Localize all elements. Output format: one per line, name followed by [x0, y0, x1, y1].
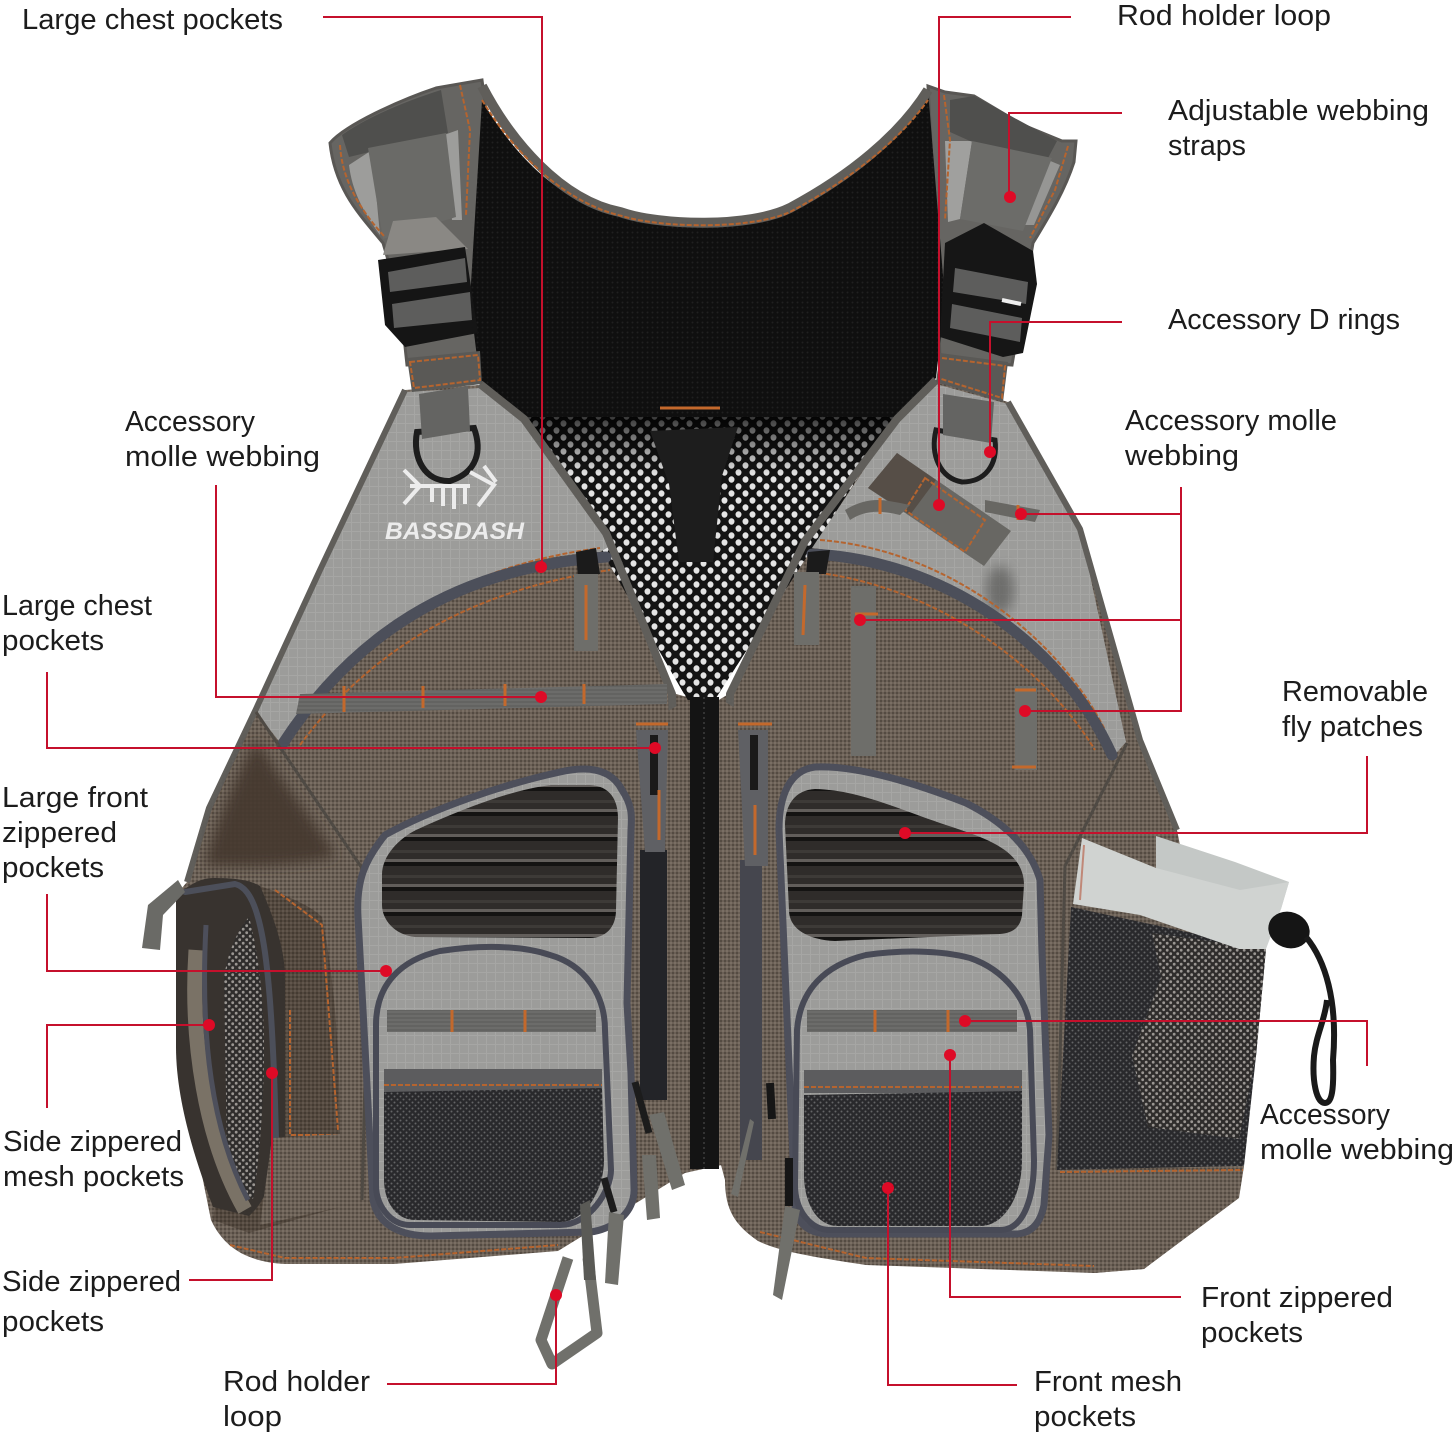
left chest molle strap	[296, 684, 667, 714]
left fly patch	[382, 785, 618, 938]
left side zipped pocket	[176, 878, 340, 1225]
label: accessory molle webbing lower right: Accessory	[1260, 1099, 1390, 1131]
right pocket mesh	[804, 1091, 1022, 1226]
label: rod holder loop bottom	[223, 1366, 370, 1433]
label: side zippered mesh pockets: mesh pockets	[3, 1161, 184, 1193]
label: side zippered pockets	[2, 1266, 181, 1338]
label: large chest pockets left	[2, 590, 152, 657]
orange tab stitching	[660, 406, 720, 410]
label: accessory D rings: Accessory D rings	[1168, 304, 1400, 336]
right chest light panel	[812, 384, 1126, 758]
label: large front zippered pockets: zippered	[2, 817, 117, 849]
label: removable fly patches	[1282, 676, 1428, 743]
right chest zipper	[812, 540, 1112, 755]
right fly patch	[785, 789, 1024, 941]
label: adjustable webbing straps	[1168, 95, 1429, 162]
rod holder loop	[541, 1258, 597, 1364]
bottom hem stitching	[230, 1232, 1094, 1266]
leader: large chest pockets top	[323, 17, 547, 573]
label: side zippered mesh pockets: Side zippered	[3, 1126, 182, 1158]
label: front mesh pockets: Front mesh	[1034, 1366, 1182, 1398]
right buckle	[940, 223, 1037, 357]
label: front zippered pockets: Front zippered	[1201, 1282, 1393, 1314]
left buckle	[378, 217, 478, 347]
flap shadow	[986, 566, 1014, 614]
left chest zipper	[282, 548, 610, 745]
right lower strap and D ring	[934, 353, 1008, 482]
label: right accessory molle webbing	[1124, 405, 1337, 472]
side seam left	[256, 712, 370, 1200]
logo: fish emblem	[404, 466, 496, 509]
right chest small tab	[1012, 686, 1037, 770]
leader: rod holder loop top	[933, 17, 1071, 511]
left side panel	[213, 886, 340, 1233]
left shoulder strap	[330, 80, 486, 365]
label: large front zippered pockets	[2, 782, 148, 884]
pale drawstring flap	[1073, 836, 1289, 949]
center mesh mask over body	[524, 417, 897, 704]
leader: side zippered mesh pockets	[47, 1019, 215, 1108]
right bottom zipper pulls	[731, 1083, 800, 1300]
right chest vertical strap	[851, 586, 878, 756]
right front pocket	[795, 952, 1034, 1230]
side seam right	[1057, 743, 1127, 1170]
bottom brown band	[1057, 1166, 1244, 1273]
label: side zippered mesh pockets	[3, 1126, 184, 1193]
neck binding	[482, 86, 928, 223]
leader: front mesh pockets	[882, 1182, 1017, 1385]
label: side zippered pockets: pockets	[2, 1306, 104, 1338]
right mesh bottle pocket	[1057, 907, 1266, 1273]
lighter mesh sleeve	[1132, 933, 1266, 1139]
label: right accessory molle webbing: webbing	[1124, 440, 1239, 472]
leader: front zippered pockets	[944, 1049, 1181, 1297]
label: large front zippered pockets: Large front	[2, 782, 148, 814]
left upper pocket	[358, 769, 634, 1236]
label: rod holder loop bottom: Rod holder	[223, 1366, 370, 1398]
label: left accessory molle webbing: molle webbing	[125, 441, 320, 473]
left bottom zipper pulls	[580, 1082, 685, 1285]
leader: accessory D rings	[984, 322, 1122, 458]
label: front zippered pockets: pockets	[1201, 1317, 1303, 1349]
leader: rod holder loop bottom	[387, 1289, 562, 1384]
label: accessory molle webbing lower right: molle webbing	[1260, 1134, 1454, 1166]
center mesh panel	[524, 417, 897, 704]
left vertical zipper	[636, 724, 668, 1100]
left lower strap and D ring	[407, 351, 482, 481]
right upper pocket	[779, 767, 1049, 1234]
leader: large front zippered pockets	[47, 894, 392, 977]
outer left binding	[187, 390, 405, 882]
label: front mesh pockets	[1034, 1366, 1182, 1433]
logo: wordmark: BASSDASH	[385, 518, 525, 545]
leader: left accessory molle webbing	[216, 485, 547, 703]
label: adjustable webbing straps: straps	[1168, 130, 1246, 162]
leader: accessory molle webbing lower right	[959, 1015, 1367, 1066]
label: front mesh pockets: pockets	[1034, 1401, 1136, 1433]
label: large chest pockets left: pockets	[2, 625, 104, 657]
label: left accessory molle webbing	[125, 406, 320, 473]
drawstring toggle and cord	[1263, 906, 1334, 1103]
left front pocket	[376, 947, 611, 1225]
label: rod holder loop top: Rod holder loop	[1117, 0, 1331, 32]
vest body base	[176, 380, 1244, 1273]
center placket	[640, 700, 778, 1172]
mesh top shade	[524, 417, 897, 475]
left side panel stitches	[275, 890, 340, 1135]
left pocket molle strap	[387, 1010, 596, 1032]
dark side panel left	[205, 740, 336, 866]
right pocket flap band	[804, 1070, 1022, 1093]
leader: side zippered pockets	[189, 1067, 278, 1280]
orange neck stitching	[482, 100, 928, 225]
black neck mesh	[470, 90, 945, 417]
upper right molle strip	[845, 498, 1040, 522]
label: large chest pockets left: Large chest	[2, 590, 152, 622]
label: front zippered pockets	[1201, 1282, 1393, 1349]
label: side zippered pockets: Side zippered	[2, 1266, 181, 1298]
side pocket zipper pull	[142, 880, 185, 950]
left pocket flap band	[384, 1069, 602, 1092]
label: right accessory molle webbing: Accessory molle	[1125, 405, 1337, 437]
left chest binding	[480, 384, 688, 1170]
left chest zipper pull	[574, 548, 600, 651]
leader: right accessory molle webbing	[854, 487, 1181, 717]
black center tab	[650, 427, 738, 562]
leader: removable fly patches	[899, 756, 1367, 839]
leader: large chest pockets left	[47, 672, 661, 754]
label: rod holder loop bottom: loop	[223, 1401, 282, 1433]
label: large chest pockets top: Large chest pockets	[22, 4, 283, 36]
label: large front zippered pockets: pockets	[2, 852, 104, 884]
left chest light panel	[256, 388, 612, 745]
rod holder flap	[868, 453, 1011, 566]
right vertical zipper	[738, 724, 772, 1160]
center main zipper	[690, 697, 719, 1169]
left pocket mesh	[384, 1088, 604, 1222]
right chest binding	[722, 380, 936, 1160]
label: adjustable webbing straps: Adjustable webbing	[1168, 95, 1429, 127]
vest illustration	[142, 80, 1334, 1364]
outer right binding	[1008, 402, 1177, 830]
label: left accessory molle webbing: Accessory	[125, 406, 255, 438]
right chest zipper pull	[794, 550, 830, 645]
leader: adjustable webbing straps	[1004, 113, 1122, 203]
label: removable fly patches: fly patches	[1282, 711, 1423, 743]
label: accessory molle webbing lower right	[1260, 1099, 1454, 1166]
right shoulder strap	[928, 86, 1076, 365]
right pocket molle strap	[807, 1010, 1017, 1032]
label: removable fly patches: Removable	[1282, 676, 1428, 708]
